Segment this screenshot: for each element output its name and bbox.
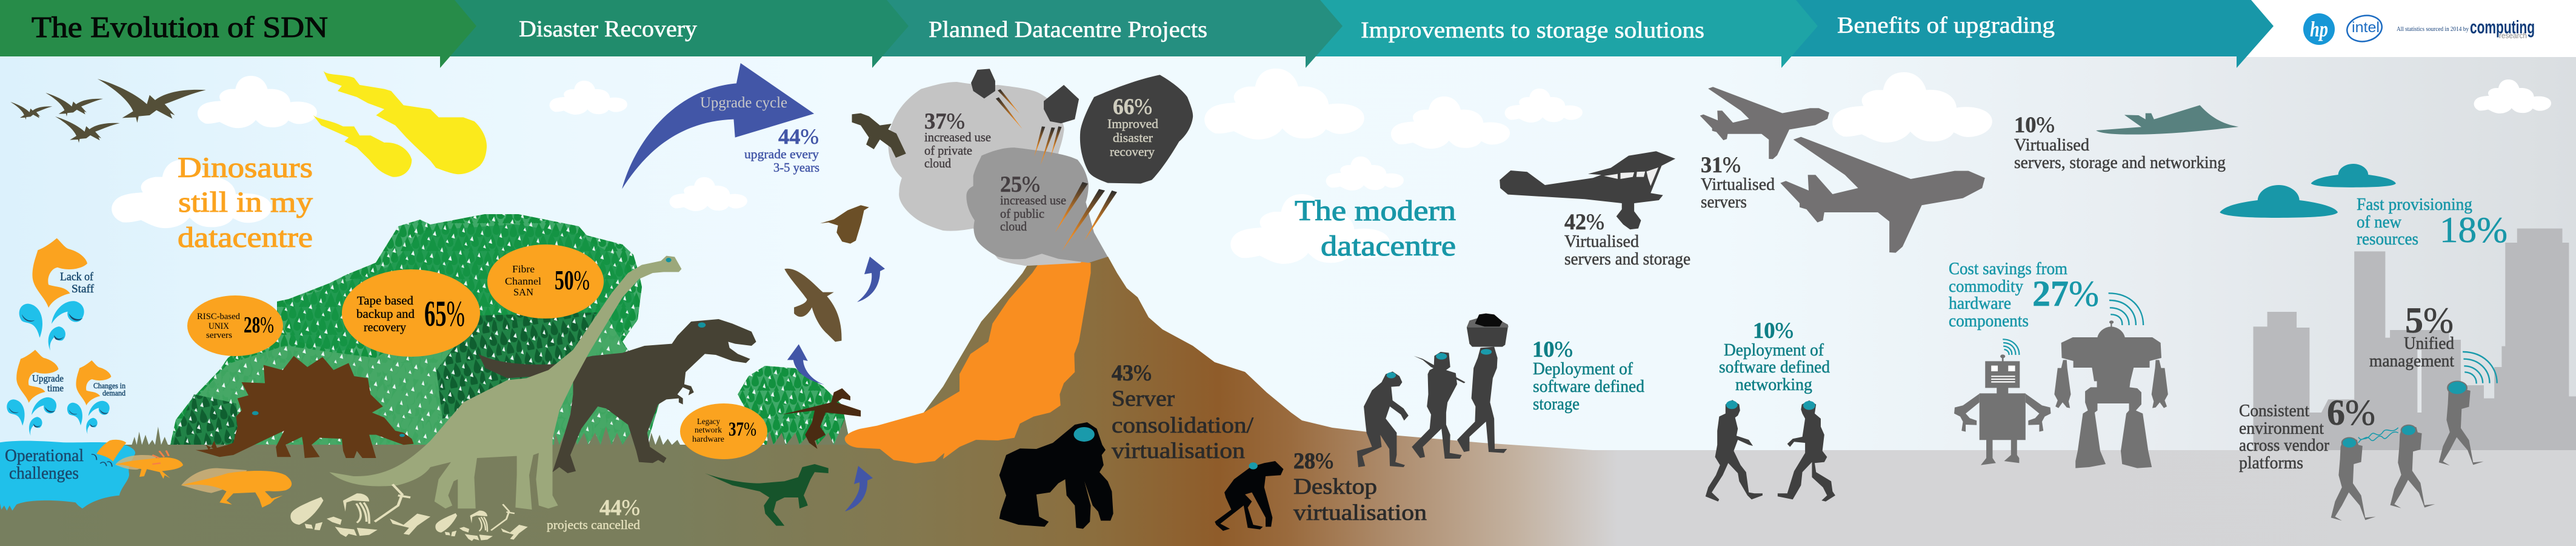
eagle mid <box>820 205 869 244</box>
ground and volcano <box>0 254 2576 546</box>
bubble: fibre channel SAN 50% <box>487 244 604 318</box>
stat: cloud text 37%: of private <box>924 143 972 158</box>
bubble: RISC-based UNIX servers 28%: servers <box>206 331 232 340</box>
arrow up 3 <box>845 466 873 511</box>
stat: cost savings 27%: hardware <box>1949 294 2011 313</box>
eagle dark <box>852 113 906 158</box>
grass spikes <box>132 419 850 445</box>
stat: 10% software defined networking <box>1719 318 1830 394</box>
bubble: fibre channel SAN 50%: SAN <box>513 286 533 298</box>
plane small <box>1700 87 1829 159</box>
jumping fish tail <box>96 440 126 462</box>
stat: 31% virtualised servers: 31% <box>1701 153 1741 178</box>
header arrow: the evolution of SDN <box>0 0 476 68</box>
stat: 28% desktop virtualisation <box>1293 449 1427 525</box>
arrow up 1 <box>787 344 824 385</box>
stat: cost savings 27%: 27% <box>2032 274 2099 314</box>
bubble: RISC-based UNIX servers 28%: RISC-based <box>197 312 240 322</box>
fish icon: upgrade time <box>7 350 58 436</box>
text: operational challenges: challenges <box>9 464 79 483</box>
stat: cloud text 25% <box>1000 172 1066 234</box>
bubble: tape based backup and recovery 65%: recovery <box>364 321 406 334</box>
text: operational challenges: time <box>47 383 64 394</box>
stat: 5% unified management: management <box>2369 352 2454 371</box>
bubble: RISC-based UNIX servers 28%: UNIX <box>209 322 229 331</box>
stat: 42% virtualised servers and storage: 42% <box>1564 210 1604 235</box>
bones right <box>435 504 528 541</box>
header arrow: improvements to storage solutions <box>0 0 1818 68</box>
stat: 10% virtualised servers, storage and networking: servers, storage and networking <box>2014 153 2226 172</box>
stat: 43% server consolidation: 43% <box>1112 361 1152 386</box>
wifi on walker <box>2463 352 2497 383</box>
source credit: computing <box>2470 16 2535 38</box>
stat: 5% unified management: Unified <box>2404 334 2454 353</box>
stat: 6% consistent environment <box>2239 393 2375 473</box>
wifi small <box>2003 339 2019 355</box>
stat: 66% improved disaster recovery: 66% <box>1113 95 1152 120</box>
heading: planned datacentre projects: Planned Datacentre Projects <box>929 17 1207 42</box>
header: logos panel <box>2237 0 2576 57</box>
arrow up 2 <box>857 257 885 302</box>
stat: 31% virtualised servers <box>1701 153 1775 212</box>
stat: 42% virtualised servers and storage: Virtualised <box>1564 232 1639 251</box>
stat: 10% virtualised servers, storage and networking: 10% <box>2014 113 2055 138</box>
stat: cost savings 27%: components <box>1949 312 2029 331</box>
small robot <box>1954 339 2050 465</box>
stat: 6% consistent environment: environment <box>2239 419 2324 438</box>
bubble: legacy network hardware 37%: Legacy <box>697 417 720 426</box>
text: operational challenges: Operational <box>5 447 84 465</box>
stat: 31% virtualised servers: Virtualised <box>1701 175 1775 194</box>
raptor green <box>705 464 829 526</box>
connected walkers with DNA link and wifi <box>2331 352 2497 521</box>
forest <box>170 214 661 445</box>
header arrow: benefits of upgrading <box>0 0 2274 68</box>
stat: 44% upgrade every 3-5 years: upgrade every <box>744 147 819 161</box>
stat: 10% virtualised servers, storage and networking: Virtualised <box>2014 136 2089 155</box>
stat: 10% software defined storage: storage <box>1533 395 1580 414</box>
logo: HP: hp <box>2310 17 2328 41</box>
stat: 28% desktop virtualisation: 28% <box>1293 449 1333 474</box>
stegosaurus <box>195 356 414 458</box>
icon: meteors <box>312 71 487 177</box>
stat: 10% virtualised servers, storage and networking <box>2014 113 2226 172</box>
stat: 43% server consolidation: consolidation/ <box>1112 413 1254 438</box>
bubble: fibre channel SAN 50%: Channel <box>505 275 541 287</box>
basket of rocks <box>1467 327 1508 347</box>
stat: 10% software defined networking: networking <box>1735 376 1812 394</box>
header arrow: planned datacentre projects <box>0 0 1343 68</box>
stat: cloud text 25%: cloud <box>1000 219 1027 234</box>
text: operational challenges: demand <box>102 388 125 397</box>
stat: 28% desktop virtualisation: Desktop <box>1293 474 1377 499</box>
stat: 42% virtualised servers and storage <box>1564 210 1690 269</box>
text: operational challenges: Upgrade <box>32 374 64 384</box>
stat: 10% software defined networking: 10% <box>1753 318 1794 343</box>
big blue arrow: upgrade cycle <box>622 63 814 189</box>
axolotl small <box>115 451 183 479</box>
stat: 42% virtualised servers and storage: servers and storage <box>1564 250 1690 269</box>
stat: cloud text 25%: of public <box>1000 206 1044 221</box>
T-rex <box>478 319 756 473</box>
stat: 10% software defined storage: 10% <box>1532 337 1573 362</box>
heading: disaster recovery: Disaster Recovery <box>519 16 697 42</box>
stat: 66% improved disaster recovery: recovery <box>1110 144 1155 159</box>
stat: 28% desktop virtualisation: virtualisation <box>1293 500 1427 525</box>
stat: cloud text 37%: cloud <box>924 156 951 170</box>
wifi large <box>2109 293 2143 325</box>
bones left <box>290 484 430 537</box>
smoke clouds <box>888 69 1193 266</box>
source credit: All statistics sourced in 2014 by <box>2397 25 2469 33</box>
eagle brown <box>784 269 842 342</box>
stat: 6% consistent environment: across vendor <box>2239 436 2330 455</box>
biplane <box>1500 151 1675 229</box>
stat: 44% projects cancelled: projects cancelled <box>547 517 641 532</box>
dark cloud <box>1080 75 1193 184</box>
bubble: tape based backup and recovery 65%: 65% <box>424 294 465 334</box>
header arrow: disaster recovery <box>0 0 909 68</box>
stat: fast provisioning 18% <box>2357 195 2508 250</box>
stealth plane <box>2096 105 2238 135</box>
text: operational challenges: Staff <box>72 283 95 295</box>
bubble: fibre channel SAN 50%: Fibre <box>512 263 535 275</box>
streaks <box>996 89 1117 251</box>
bubble: legacy network hardware 37% <box>680 403 767 459</box>
UFOs <box>2220 164 2396 218</box>
heading: dinosaurs still in my datacentre: Dinosaurs <box>178 152 313 184</box>
heading: dinosaurs still in my datacentre <box>178 152 313 254</box>
stat: 6% consistent environment: Consistent <box>2239 402 2309 420</box>
bubble: RISC-based UNIX servers 28% <box>187 295 283 356</box>
heading: dinosaurs still in my datacentre: datacentre <box>178 221 313 254</box>
stat: 6% consistent environment: 6% <box>2327 393 2375 433</box>
stat: 43% server consolidation <box>1112 361 1254 463</box>
plane large <box>1780 137 1985 253</box>
bubble: legacy network hardware 37%: network <box>695 426 722 435</box>
heading: dinosaurs still in my datacentre: still in my <box>178 186 313 218</box>
stat: 10% software defined storage: Deployment of <box>1533 360 1633 379</box>
small forest bush <box>738 366 850 445</box>
gorilla <box>999 422 1113 529</box>
stat: cost savings 27%: commodity <box>1949 277 2023 296</box>
axolotl large <box>181 468 292 508</box>
stat: fast provisioning 18%: of new <box>2357 213 2402 232</box>
heading: the modern datacentre: The modern <box>1295 195 1456 227</box>
volcano lava <box>845 258 1091 463</box>
stat: 10% software defined storage <box>1532 337 1644 414</box>
bubble: legacy network hardware 37%: hardware <box>692 435 724 444</box>
chimpanzee <box>1215 461 1283 531</box>
stat: 44% upgrade every 3-5 years: 3-5 years <box>773 160 819 175</box>
source credit <box>2397 16 2535 40</box>
logo: Intel <box>2344 12 2384 45</box>
stat: 10% software defined networking: software defined <box>1719 358 1830 377</box>
logo: Intel: intel <box>2352 19 2380 36</box>
stat: fast provisioning 18%: resources <box>2357 230 2418 249</box>
stat: 10% software defined networking: Deployment of <box>1724 341 1824 360</box>
stat: 10% software defined storage: software defined <box>1533 377 1644 396</box>
stat: fast provisioning 18%: Fast provisioning <box>2357 195 2472 214</box>
title: The Evolution of SDN <box>32 10 328 44</box>
stat: 66% improved disaster recovery: Improved <box>1107 116 1158 131</box>
bubble: tape based backup and recovery 65%: backup and <box>356 308 415 321</box>
heading: improvements to storage solutions: Improvements to storage solutions <box>1361 18 1704 43</box>
walkers software defined networking <box>1706 400 1835 502</box>
big blue arrow: upgrade cycle: Upgrade cycle <box>700 95 787 111</box>
stat: cloud text 37%: 37% <box>924 109 965 134</box>
bubble: tape based backup and recovery 65% <box>342 269 480 357</box>
fish icon: lack of staff <box>19 238 87 351</box>
stat: fast provisioning 18%: 18% <box>2440 210 2508 250</box>
stat: cloud text 37%: increased use <box>924 130 991 144</box>
stat: 31% virtualised servers: servers <box>1701 193 1747 212</box>
city skyline <box>2254 229 2576 452</box>
stat: cost savings 27% <box>1949 260 2099 331</box>
hominid evolution figures <box>1357 314 1509 467</box>
text: operational challenges: Changes in <box>93 381 125 390</box>
stat: 44% projects cancelled: 44% <box>599 496 640 521</box>
header arrow: benefits of upgrading: Benefits of upgrading <box>1837 13 2055 38</box>
fish icon: changes in demand <box>67 360 111 434</box>
stat: 6% consistent environment: platforms <box>2239 454 2303 473</box>
large robot <box>2054 293 2168 468</box>
diplodocus <box>329 256 681 510</box>
source credit: research <box>2499 31 2527 40</box>
bubble: legacy network hardware 37%: 37% <box>729 419 756 440</box>
stat: 44% upgrade every 3-5 years <box>744 124 819 175</box>
bubble: tape based backup and recovery 65%: Tape based <box>357 294 413 308</box>
dna link <box>2358 428 2398 443</box>
logo: HP <box>2303 13 2335 45</box>
panel: operational challenges pond <box>0 440 135 511</box>
stat: cloud text 25%: 25% <box>1000 172 1040 197</box>
stat: 66% improved disaster recovery <box>1107 95 1158 159</box>
clouds <box>112 69 2551 264</box>
stat: 5% unified management <box>2369 300 2454 371</box>
stat: 44% projects cancelled <box>547 496 641 532</box>
heading: the modern datacentre: datacentre <box>1321 230 1456 262</box>
stat: 5% unified management: 5% <box>2405 300 2454 340</box>
icon: pterodactyl flock <box>10 79 206 143</box>
stat: 44% upgrade every 3-5 years: 44% <box>778 124 819 149</box>
stat: 43% server consolidation: Server <box>1112 386 1175 411</box>
text: operational challenges: Lack of <box>60 271 94 283</box>
stat: cloud text 25%: increased use <box>1000 193 1066 207</box>
stat: 43% server consolidation: virtualisation <box>1112 439 1245 463</box>
bubble: RISC-based UNIX servers 28%: 28% <box>244 312 274 338</box>
rocks <box>971 69 1079 123</box>
heading: the modern datacentre <box>1295 195 1456 262</box>
stat: 66% improved disaster recovery: disaster <box>1113 130 1153 145</box>
text: operational challenges <box>5 271 125 483</box>
stat: cost savings 27%: Cost savings from <box>1949 260 2067 278</box>
stat: cloud text 37% <box>924 109 991 170</box>
bubble: fibre channel SAN 50%: 50% <box>555 265 590 295</box>
feathered raptor <box>782 388 861 449</box>
